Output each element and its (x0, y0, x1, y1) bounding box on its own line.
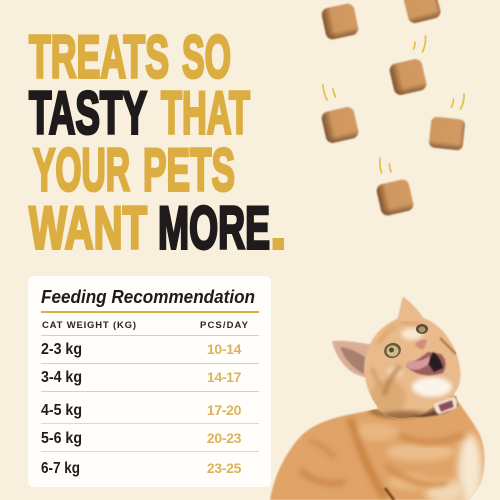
cat head (364, 297, 460, 421)
treat 4 (320, 106, 360, 144)
cat collar (408, 396, 458, 417)
treats falling (320, 0, 466, 217)
row 6-7 kg: 6-7 kg (41, 460, 80, 477)
row 4-5 kg (41, 402, 242, 419)
headline: THAT (161, 80, 250, 146)
column headers: CAT WEIGHT (KG) (42, 320, 136, 331)
headline (29, 24, 287, 262)
treat 1 (321, 2, 359, 41)
cat eyes (382, 324, 428, 360)
treat 2 (402, 0, 442, 25)
row 2-3 kg: 2-3 kg (41, 341, 82, 358)
treat 5 (428, 116, 466, 151)
cat left ear (332, 341, 372, 378)
headline: WANT (29, 194, 147, 262)
row 6-7 kg (41, 460, 242, 477)
headline: MORE (158, 194, 270, 262)
headline: SO (182, 24, 231, 90)
row 2-3 kg: 10-14 (207, 341, 242, 357)
row 4-5 kg: 4-5 kg (41, 402, 82, 419)
headline: TREATS (29, 24, 169, 90)
row 3-4 kg (41, 369, 242, 386)
cat body (270, 392, 484, 500)
cat nose (415, 340, 427, 349)
row 3-4 kg: 3-4 kg (41, 369, 82, 386)
row 4-5 kg: 17-20 (207, 402, 242, 418)
row 3-4 kg: 14-17 (207, 369, 242, 385)
row 6-7 kg: 23-25 (207, 460, 242, 476)
headline: YOUR (33, 136, 130, 204)
headline: PETS (143, 136, 235, 204)
panel: feeding recommendation table: PCS/DAY (200, 320, 249, 331)
cat mouth and tongue (406, 352, 446, 375)
row 5-6 kg: 20-23 (207, 430, 242, 446)
headline: . (270, 194, 287, 262)
treat 6 (375, 178, 415, 217)
cat photo illustration (270, 297, 484, 500)
row 5-6 kg (41, 430, 242, 447)
treat 3 (388, 58, 428, 96)
panel: feeding recommendation table (28, 276, 271, 487)
white chin (412, 377, 452, 397)
headline: TASTY (29, 80, 147, 146)
table title: Feeding Recommendation (41, 287, 255, 307)
cat right ear (398, 297, 424, 322)
row 5-6 kg: 5-6 kg (41, 430, 82, 447)
row 2-3 kg (41, 341, 242, 358)
motion marks (323, 36, 464, 173)
